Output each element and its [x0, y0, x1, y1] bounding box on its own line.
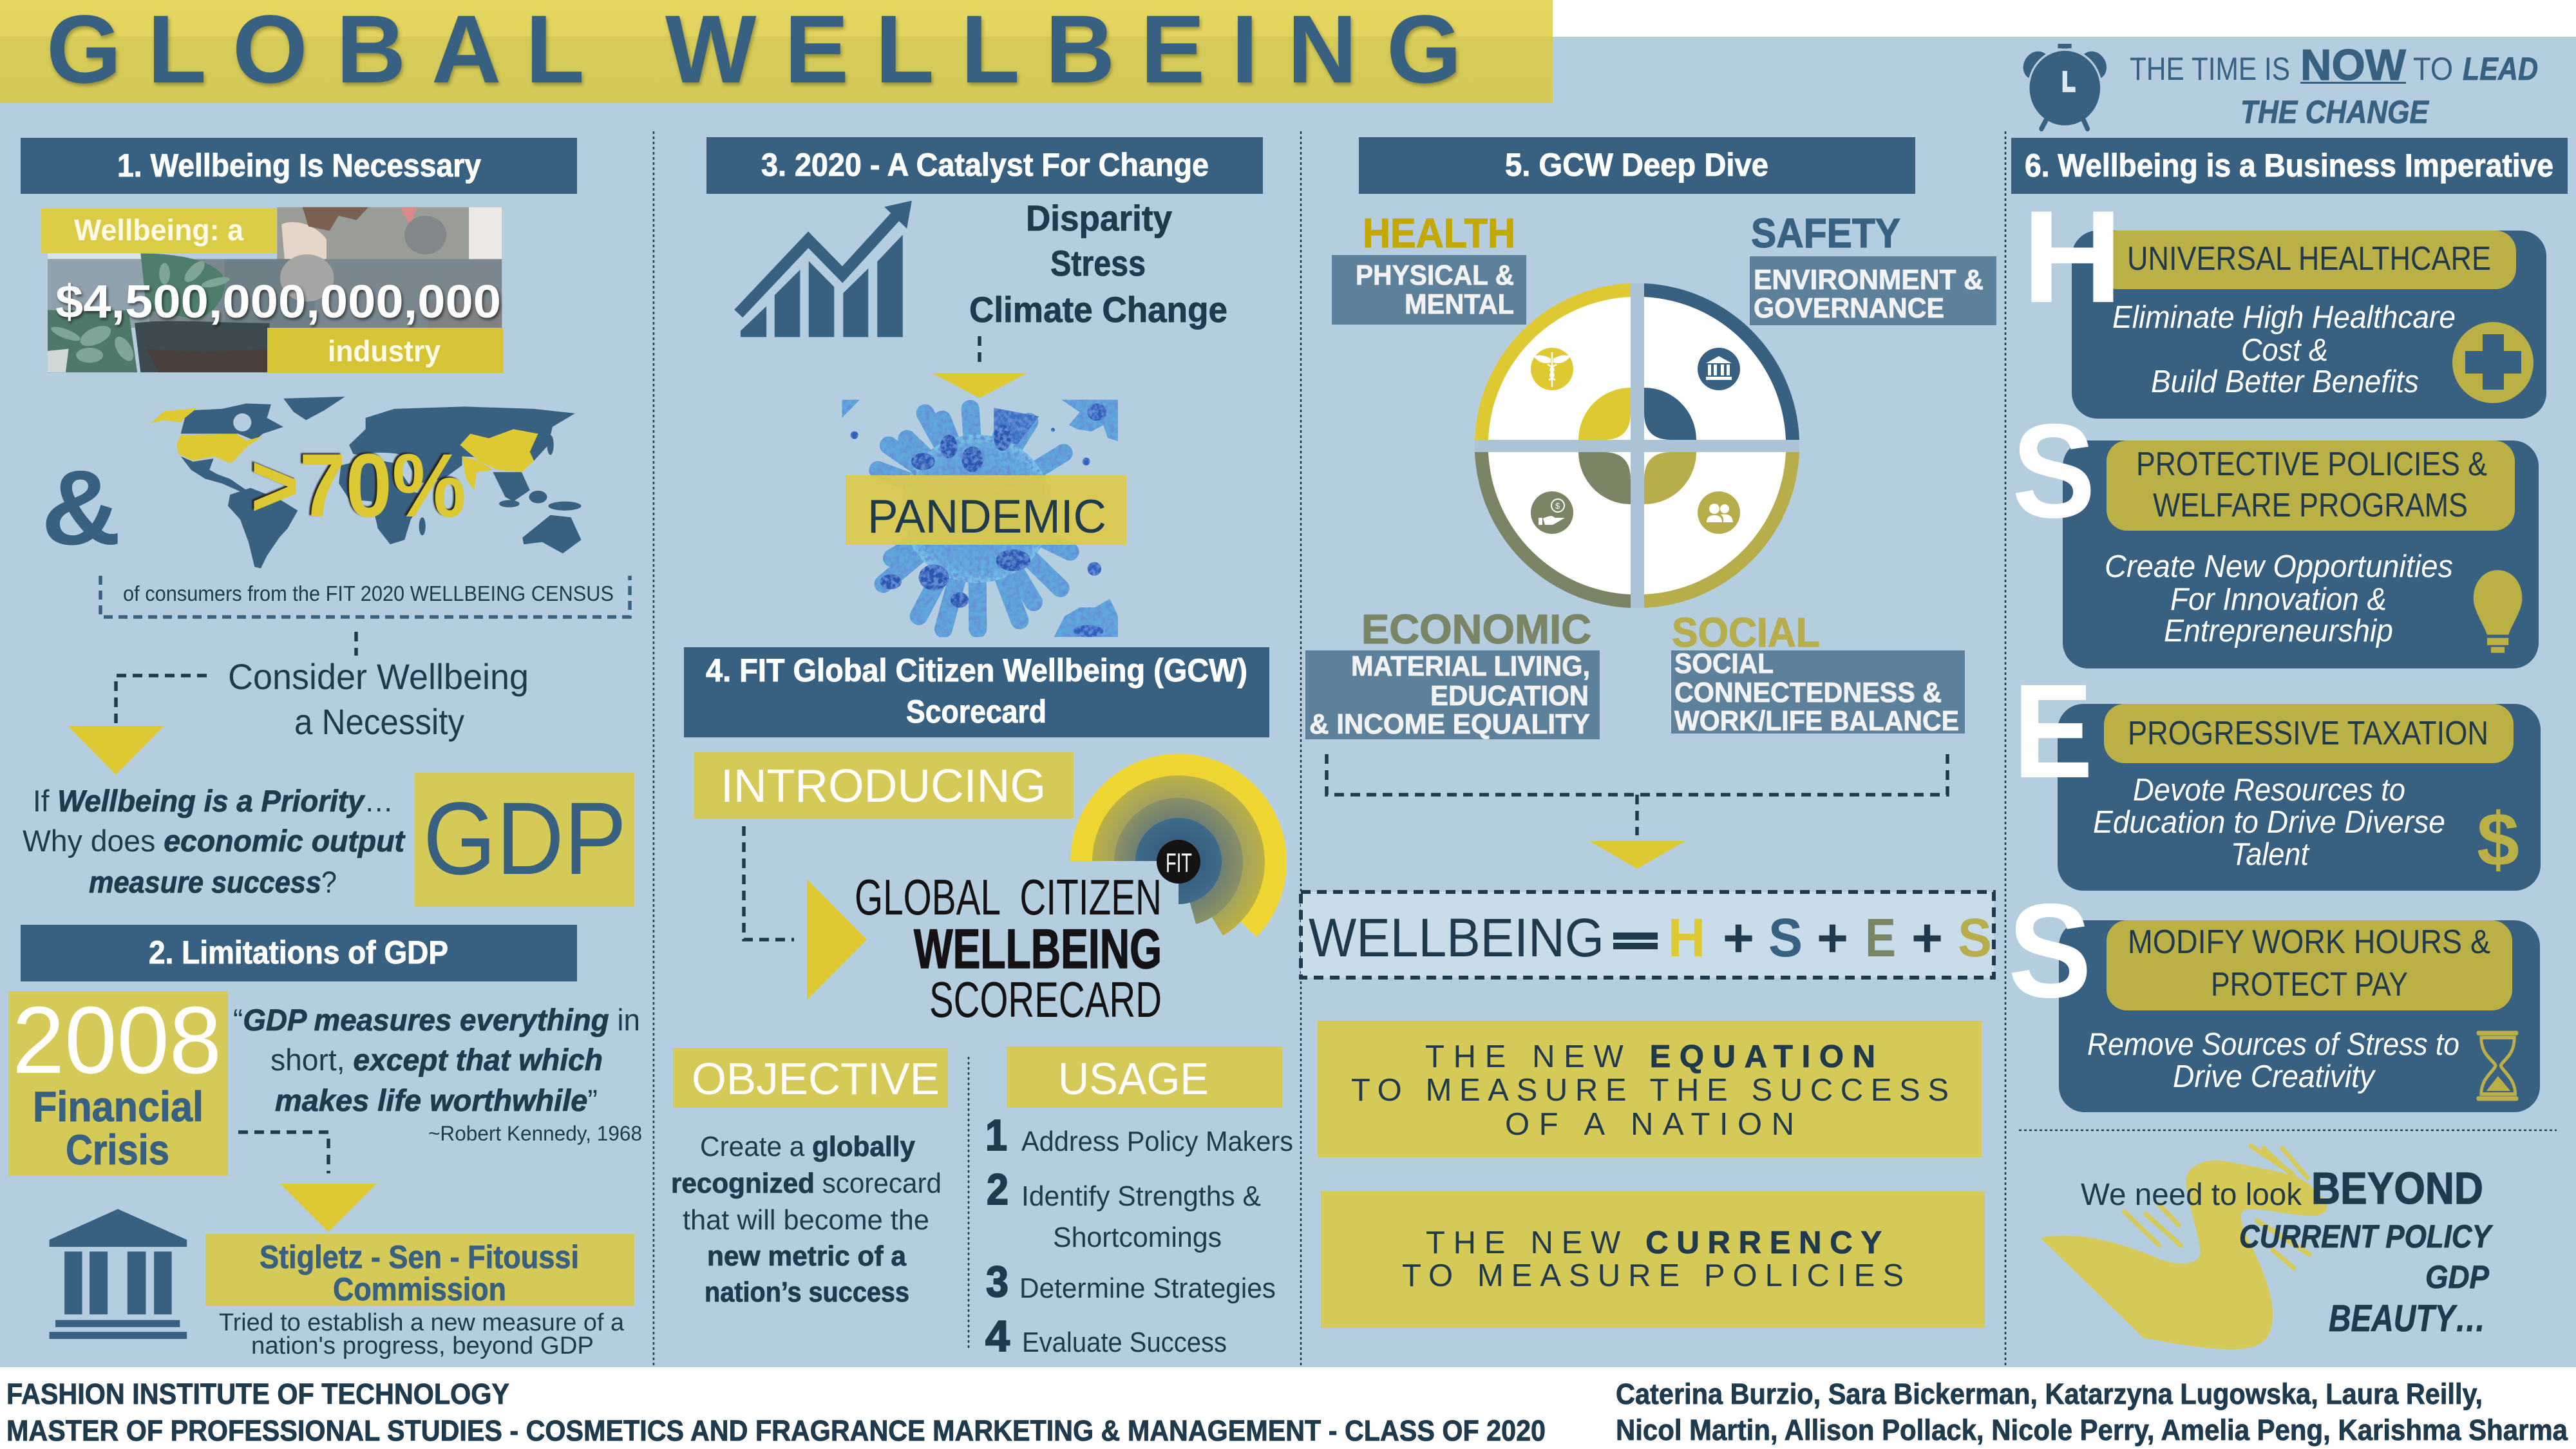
priority question text: Why does economic output	[23, 824, 406, 858]
call-to-action text: THE TIME IS	[2130, 51, 2290, 87]
wheel quadrant: social	[1644, 452, 1799, 608]
panel: 6. business imperative	[2008, 138, 2568, 1349]
card: progressive taxation: Talent	[2231, 837, 2310, 872]
card: progressive taxation	[2058, 704, 2541, 891]
priority question text	[23, 784, 406, 899]
wheel quadrant: health	[1475, 283, 1631, 440]
safety label: SAFETY	[1751, 210, 1900, 256]
call-to-action text: LEAD	[2463, 51, 2538, 87]
card: modify work hours	[2059, 920, 2540, 1112]
quadrant wheel	[1475, 283, 1799, 608]
card: modify work hours: Remove Sources of Stress to	[2087, 1027, 2459, 1062]
panel: 2. limitations of GDP	[8, 925, 642, 1359]
arrow: to priority question	[68, 676, 207, 775]
icon: light bulb	[2474, 570, 2522, 653]
scorecard wordmark	[855, 869, 1162, 1028]
arrow: to commission	[238, 1132, 377, 1232]
card: protective policies: Create New Opportunities	[2105, 549, 2453, 584]
card: universal healthcare	[2072, 231, 2546, 419]
beyond statement: GDP	[2425, 1259, 2490, 1295]
heading 4	[684, 647, 1269, 737]
2008 financial crisis box: 2008	[12, 987, 222, 1094]
arrow: to logo	[744, 826, 867, 1000]
wellbeing formula: +	[1817, 907, 1848, 968]
Stiglitz commission box: Commission	[333, 1271, 506, 1307]
objective text: recognized scorecard	[671, 1168, 942, 1199]
usage list: 2	[987, 1165, 1009, 1214]
big letter E: E	[2013, 657, 2093, 806]
beyond statement: BEYOND	[2311, 1163, 2483, 1213]
new equation box: OF A NATION	[1505, 1107, 1794, 1142]
economic label: MATERIAL LIVING,	[1351, 650, 1590, 682]
card: modify work hours: Drive Creativity	[2173, 1059, 2376, 1094]
health label: PHYSICAL &	[1356, 260, 1514, 291]
call-to-action text: NOW	[2300, 41, 2407, 90]
photo with industry value: $4,500,000,000,000	[55, 276, 501, 328]
2008 financial crisis box	[8, 987, 228, 1176]
wellbeing formula: E	[1865, 907, 1896, 968]
wheel quadrant: safety	[1644, 283, 1799, 440]
health label	[1332, 210, 1526, 325]
wellbeing formula: +	[1723, 907, 1754, 968]
usage list: Determine Strategies	[1019, 1273, 1276, 1304]
panel: 3. 2020 catalyst	[706, 137, 1263, 637]
icon: institution building	[50, 1209, 187, 1339]
commission description: nation's progress, beyond GDP	[251, 1332, 594, 1359]
call-to-action text: TO	[2413, 51, 2453, 87]
economic label: & INCOME EQUALITY	[1309, 708, 1590, 740]
new equation box	[1318, 1021, 1982, 1157]
card: protective policies: WELFARE PROGRAMS	[2153, 487, 2468, 524]
2008 financial crisis box: Financial	[33, 1083, 204, 1130]
panel: 1. wellbeing is necessary	[21, 138, 634, 907]
safety label	[1750, 210, 1996, 325]
photo with industry value: Wellbeing: a	[74, 213, 243, 247]
safety label: GOVERNANCE	[1754, 292, 1944, 324]
photo with industry value	[41, 207, 503, 375]
beyond statement: BEAUTY…	[2329, 1298, 2486, 1340]
introducing label: INTRODUCING	[721, 761, 1046, 812]
beyond statement: We need to look	[2081, 1178, 2302, 1212]
health label: HEALTH	[1363, 210, 1515, 256]
social label	[1671, 609, 1965, 737]
objective label: OBJECTIVE	[692, 1054, 940, 1104]
arrow: to pandemic	[931, 336, 1028, 398]
social label: SOCIAL	[1674, 648, 1774, 679]
scorecard wordmark: WELLBEING	[914, 918, 1162, 980]
crisis list: Climate Change	[969, 289, 1227, 330]
objective text: new metric of a	[707, 1240, 907, 1272]
health label: MENTAL	[1405, 289, 1514, 320]
school and programme	[6, 1378, 1546, 1447]
priority question text: If Wellbeing is a Priority…	[33, 784, 393, 818]
school and programme: MASTER OF PROFESSIONAL STUDIES - COSMETICS AND FRAGRANCE MARKETING & MANAGEMENT - CLASS OF 2020	[6, 1414, 1546, 1447]
crisis list	[969, 198, 1227, 330]
Robert Kennedy quote	[233, 1003, 642, 1145]
pandemic label	[846, 475, 1126, 545]
objective text: that will become the	[683, 1204, 929, 1236]
crisis list: Disparity	[1026, 198, 1172, 238]
consider wellbeing text	[228, 656, 529, 742]
beyond statement	[2081, 1163, 2494, 1340]
economic label: ECONOMIC	[1361, 606, 1591, 652]
footer	[6, 1378, 2568, 1447]
heading 1	[21, 138, 577, 194]
GDP box: GDP	[423, 781, 627, 896]
panel: 5. GCW deep dive	[1301, 137, 1996, 1328]
usage list: 4	[985, 1312, 1010, 1361]
heading 3: 3. 2020 - A Catalyst For Change	[761, 147, 1209, 183]
wellbeing formula: +	[1911, 907, 1943, 968]
social label: CONNECTEDNESS &	[1674, 677, 1942, 708]
big letter S: S	[2012, 397, 2096, 546]
call-to-action text: THE CHANGE	[2240, 94, 2429, 130]
Robert Kennedy quote: ~Robert Kennedy, 1968	[428, 1122, 642, 1145]
icon: medical cross	[2452, 322, 2533, 403]
arrow: bracket to formula	[1327, 754, 1947, 869]
wellbeing formula: S	[1958, 907, 1992, 968]
usage label	[1007, 1046, 1282, 1108]
card: universal healthcare: Cost &	[2241, 333, 2328, 368]
objective text: Create a globally	[700, 1131, 916, 1162]
logo: semicircle rings: FIT	[1166, 848, 1192, 878]
consider wellbeing text: a Necessity	[294, 701, 464, 742]
usage list: Shortcomings	[1053, 1222, 1222, 1253]
social label: WORK/LIFE BALANCE	[1674, 705, 1959, 737]
usage label: USAGE	[1058, 1054, 1209, 1104]
card: protective policies: Entrepreneurship	[2164, 614, 2393, 649]
pandemic label: PANDEMIC	[867, 491, 1106, 543]
card: protective policies: For Innovation &	[2170, 582, 2387, 617]
big letter H: H	[2022, 184, 2123, 330]
economic label: EDUCATION	[1430, 680, 1589, 712]
usage list: 3	[986, 1257, 1009, 1306]
heading 5: 5. GCW Deep Dive	[1505, 147, 1768, 183]
ampersand: &	[41, 448, 121, 567]
priority question text: measure success?	[89, 865, 337, 899]
virus illustration	[842, 400, 1118, 637]
heading 2: 2. Limitations of GDP	[149, 934, 448, 971]
card: modify work hours: PROTECT PAY	[2211, 966, 2408, 1003]
heading 2	[21, 925, 577, 981]
new currency box: THE NEW CURRENCY	[1426, 1226, 1882, 1260]
authors: Caterina Burzio, Sara Bickerman, Katarzyna Lugowska, Laura Reilly,	[1616, 1378, 2483, 1410]
card: progressive taxation: PROGRESSIVE TAXATION	[2128, 715, 2488, 752]
new currency box	[1321, 1191, 1985, 1328]
usage list: Evaluate Success	[1022, 1327, 1227, 1358]
economic label	[1305, 606, 1600, 740]
icon: rising chart	[739, 201, 912, 337]
usage list: Identify Strengths &	[1021, 1180, 1261, 1212]
2008 financial crisis box: Crisis	[66, 1126, 169, 1173]
heading 4: Scorecard	[906, 694, 1046, 730]
card: progressive taxation: Devote Resources to	[2133, 773, 2405, 808]
big letter S: S	[2008, 876, 2092, 1026]
usage list	[985, 1111, 1293, 1361]
wellbeing formula: H	[1668, 907, 1705, 968]
objective text: nation’s success	[705, 1276, 909, 1308]
usage list: Address Policy Makers	[1021, 1126, 1293, 1157]
Stiglitz commission box: Stigletz - Sen - Fitoussi	[260, 1239, 579, 1275]
panel: 4. FIT GCW scorecard	[671, 647, 1293, 1361]
scorecard wordmark: SCORECARD	[929, 971, 1162, 1028]
wellbeing formula: S	[1768, 907, 1803, 968]
world map	[150, 397, 581, 568]
new equation box: THE NEW EQUATION	[1425, 1039, 1875, 1074]
heading 3	[706, 137, 1263, 194]
usage list: 1	[985, 1111, 1007, 1160]
Robert Kennedy quote: “GDP measures everything in	[233, 1003, 640, 1037]
census caption with bracket: of consumers from the FIT 2020 WELLBEING CENSUS	[123, 582, 614, 605]
commission description	[219, 1309, 625, 1359]
wellbeing formula	[1301, 892, 1994, 978]
objective text	[671, 1131, 942, 1308]
new equation box: TO MEASURE THE SUCCESS	[1351, 1073, 1949, 1108]
heading 4: 4. FIT Global Citizen Wellbeing (GCW)	[706, 652, 1247, 688]
Robert Kennedy quote: makes life worthwhile”	[275, 1083, 598, 1117]
census caption with bracket	[100, 576, 630, 617]
stat: over 70 percent: >70%	[251, 435, 466, 536]
connector	[354, 632, 358, 656]
wheel quadrant: economic: $	[1555, 501, 1560, 511]
heading 5	[1359, 137, 1915, 194]
wheel quadrant: economic	[1475, 452, 1631, 608]
callout: the time is now	[2019, 41, 2538, 130]
photo with industry value: industry	[328, 334, 440, 368]
beyond statement: CURRENT POLICY	[2239, 1218, 2494, 1255]
commission description: Tried to establish a new measure of a	[219, 1309, 625, 1336]
card: protective policies	[2063, 440, 2539, 668]
title banner	[0, 0, 1553, 103]
wellbeing formula: WELLBEING	[1309, 907, 1604, 968]
authors	[1616, 1378, 2568, 1446]
icon: alarm clock	[2019, 44, 2111, 129]
introducing label	[694, 752, 1074, 819]
card: progressive taxation: Education to Drive Diverse	[2093, 805, 2445, 840]
school and programme: FASHION INSTITUTE OF TECHNOLOGY	[6, 1378, 509, 1410]
social label: SOCIAL	[1672, 609, 1820, 656]
consider wellbeing text: Consider Wellbeing	[228, 656, 529, 697]
card: universal healthcare: Eliminate High Healthcare	[2112, 300, 2456, 335]
icon: hourglass	[2477, 1031, 2518, 1101]
icon: dollar sign: $	[2477, 797, 2519, 882]
heading 1: 1. Wellbeing Is Necessary	[117, 147, 481, 184]
illustration: yellow hand shape	[2040, 1146, 2327, 1349]
call-to-action text	[2130, 41, 2538, 130]
card: universal healthcare: UNIVERSAL HEALTHCARE	[2127, 240, 2491, 278]
card: universal healthcare: Build Better Benefits	[2151, 365, 2419, 399]
Robert Kennedy quote: short, except that which	[270, 1043, 603, 1077]
card: modify work hours: MODIFY WORK HOURS &	[2128, 923, 2490, 961]
safety label: ENVIRONMENT &	[1754, 264, 1984, 296]
new currency box: TO MEASURE POLICIES	[1402, 1258, 1904, 1293]
heading 6	[2011, 138, 2568, 194]
card: protective policies: PROTECTIVE POLICIES &	[2136, 446, 2487, 483]
logo: semicircle rings	[1070, 753, 1287, 937]
crisis list: Stress	[1050, 243, 1146, 283]
Stiglitz commission box	[205, 1234, 634, 1307]
scorecard wordmark: GLOBAL CITIZEN	[855, 869, 1162, 925]
